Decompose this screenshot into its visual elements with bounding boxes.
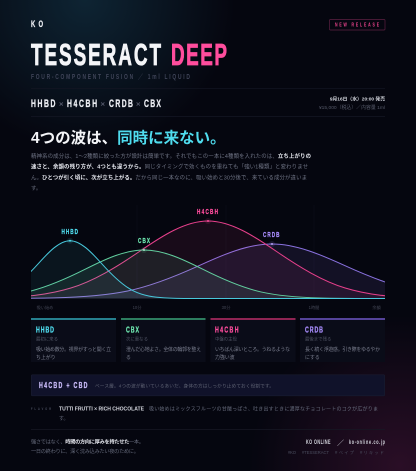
time axis labels: 1時間	[309, 305, 319, 311]
flavor: 吸い始めはミックスフルーツの甘酸っぱさ、吐き出すときに濃厚なチョコレートのコクが広がりま	[149, 406, 378, 412]
footer links: ko-online.co.jp	[349, 439, 385, 447]
curve: HHBD	[31, 240, 385, 299]
intro paragraph: す。	[31, 185, 41, 192]
closing statement	[31, 438, 144, 455]
badge: new release: NEW RELEASE	[335, 22, 379, 28]
flavor: TUTTI FRUTTI × RICH CHOCOLATE	[59, 406, 144, 412]
footer links	[306, 439, 385, 447]
formula: four components: CRDB	[109, 97, 133, 109]
formula: four components: H4CBH	[67, 97, 97, 109]
footer links: ／	[337, 439, 344, 447]
intro paragraph: ん。ひとつが引く頃に、次が立ち上がる。だから同じ一本なのに、吸い始めと30分後で、来ている成分が違いま	[31, 173, 307, 181]
formula: four components: ×	[59, 102, 64, 108]
curve: CRDB	[31, 244, 385, 299]
release info	[319, 96, 385, 111]
peak marker: H4CBH	[205, 218, 211, 224]
panel: CBX: CBX	[126, 326, 139, 335]
panel: CBX: る	[126, 355, 131, 361]
flavor: す。	[59, 416, 69, 422]
hashtags: #リキッド	[360, 450, 384, 455]
intro paragraph	[31, 152, 311, 192]
formula: four components: HHBD	[31, 97, 56, 109]
time axis labels: 吸い始め	[37, 304, 53, 311]
label: CRDB: CRDB	[263, 231, 280, 239]
title	[31, 39, 227, 72]
title: TESSERACT	[31, 39, 161, 72]
peak marker: HHBD	[67, 238, 73, 244]
panel: base layer	[31, 375, 385, 396]
flavor: FLAVOR	[31, 406, 51, 411]
closing statement: 強さではなく、時間の方向に厚みを持たせた一本。	[31, 438, 144, 446]
time axis labels: 10分	[133, 304, 142, 311]
title: DEEP	[171, 39, 227, 72]
panel: HHBD: 吸い始め数分。視界がすっと開く立	[36, 346, 111, 353]
closing statement: 一日の終わりに、深く沈み込みたい夜のために。	[31, 447, 139, 455]
hashtags	[288, 450, 384, 456]
time axis labels: 余韻	[372, 304, 381, 311]
label: HHBD: HHBD	[62, 228, 78, 236]
release info: ¥15,000（税込）／内容量 1ml	[319, 104, 385, 111]
formula: four components: ×	[136, 102, 140, 108]
panel: H4CBH	[210, 318, 296, 362]
panel: H4CBH: H4CBH	[215, 326, 238, 335]
peak marker: CBX	[141, 247, 147, 253]
brand mark: KO	[31, 19, 43, 29]
panel: base layer: ベース層。4つの波が動いているあいだ、身体の方はしっかり止めておく役割です。	[95, 383, 274, 390]
chart: four wave curves	[31, 208, 385, 299]
hashtags: #ベイプ	[335, 450, 355, 456]
panel: CRDB: 最後まで残る	[305, 336, 331, 342]
panel: CRDB: にする	[305, 355, 320, 361]
label: CBX: CBX	[138, 237, 151, 245]
panel: CBX: 次に重なる	[126, 336, 148, 342]
peak marker: CRDB	[269, 241, 275, 247]
panel: HHBD	[31, 318, 116, 362]
hashtags: #TESSERACT	[302, 450, 329, 455]
panel: HHBD: 最初に来る	[36, 336, 58, 342]
release info: 9月16日（水）20:00 発売	[330, 96, 385, 103]
panel: HHBD: ち上がり	[36, 354, 56, 361]
panel: base layer: H4CBD + CBD	[39, 382, 87, 391]
panel: H4CBH: いちばん深いところ。うねるような	[215, 346, 290, 353]
time axis labels: 30分	[222, 304, 231, 311]
curve: H4CBH	[31, 220, 385, 298]
intro paragraph: 精神系の成分は、1〜2種類に絞った方が設計は簡単です。それでもこの一本に4種類を入れたのは、立ち上がりの	[31, 152, 311, 160]
panel: H4CBH: 中盤の主役	[215, 336, 238, 342]
panel: HHBD: HHBD	[36, 326, 54, 335]
curve: CBX	[31, 250, 354, 298]
formula: four components: CBX	[144, 97, 162, 109]
heading: 4つの波は、同時に来ない。	[31, 129, 226, 147]
panel: H4CBH: 力強い波	[215, 354, 235, 361]
footer links: KO ONLINE	[306, 439, 331, 447]
flavor	[31, 406, 378, 422]
hashtags: #KO	[288, 450, 297, 455]
panel: CRDB	[300, 318, 385, 362]
time axis labels	[37, 304, 381, 311]
panel: CBX: 澄んだ心地よさ。全体の輪郭を整え	[126, 346, 201, 353]
badge: new release	[330, 20, 385, 30]
panel: CBX	[121, 318, 206, 362]
panel: CRDB: 長く続く浮遊感。引き際をゆるやか	[305, 346, 380, 353]
subtitle: FOUR-COMPONENT FUSION ／ 1ml LIQUID	[31, 73, 190, 81]
label: H4CBH: H4CBH	[197, 208, 218, 217]
formula: four components	[31, 97, 162, 109]
panel: CRDB: CRDB	[305, 326, 323, 335]
intro paragraph: 速さと、余韻の残り方が、4つとも違うから。同じタイミングで効くものを重ねても「強い1種類」と変わりませ	[31, 163, 308, 171]
formula: four components: ×	[100, 102, 105, 108]
